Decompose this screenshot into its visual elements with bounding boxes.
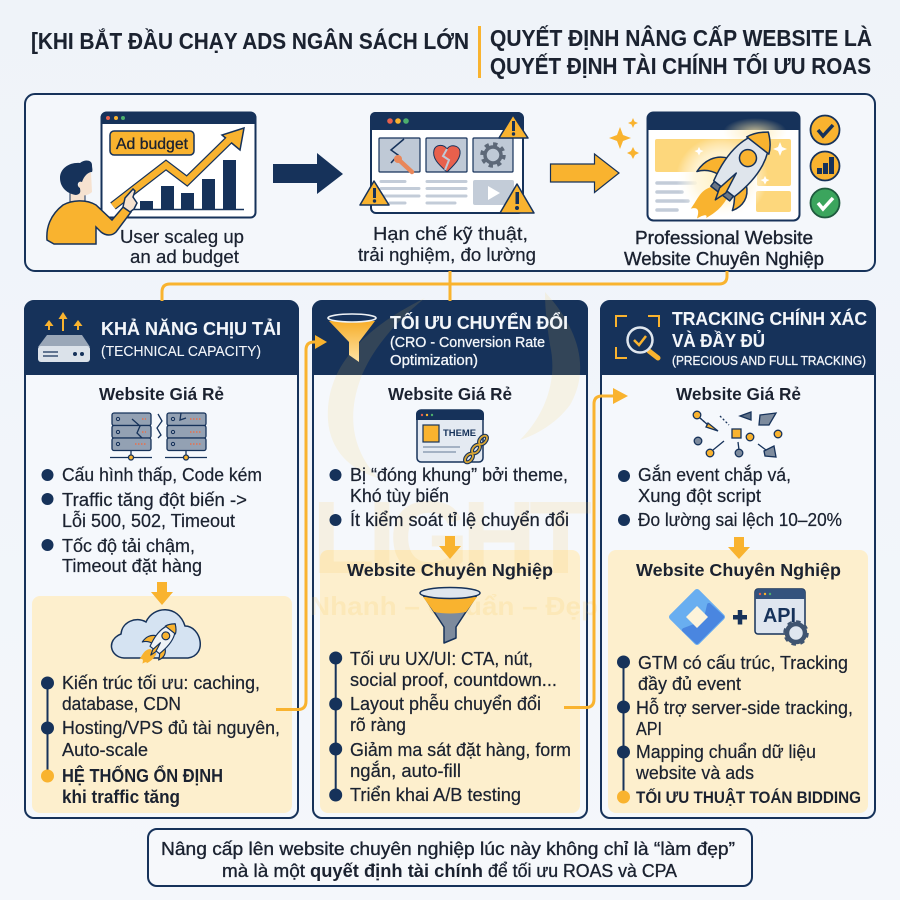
text: step two caption: Hạn chế kỹ thuật,	[373, 224, 528, 244]
connector: top panel to cards	[162, 271, 727, 301]
list: tracking solutions	[617, 653, 861, 807]
list: capacity problems: Traffic tăng đột biến ->	[62, 490, 247, 510]
icon: locked theme window	[416, 410, 489, 464]
arrow: navy flow arrow	[273, 153, 343, 194]
panel: tracking card frame	[600, 301, 876, 818]
heading: capacity card: (TECHNICAL CAPACITY)	[101, 344, 261, 360]
list: tracking solutions: TỐI ƯU THUẬT TOÁN BIDDING	[636, 787, 861, 807]
list: conversion solutions: social proof, countdown...	[350, 670, 557, 690]
list: conversion problems: Bị “đóng khung” bởi theme,	[350, 465, 568, 485]
title: left heading: [KHI BẮT ĐẦU CHẠY ADS NGÂN SÁCH LỚN	[31, 27, 469, 54]
heading: conversion card: TỐI ƯU CHUYỂN ĐỔI	[390, 312, 568, 333]
arrow: conversion down	[439, 536, 461, 559]
icon: person pointing	[47, 161, 137, 244]
list: capacity problems	[42, 465, 262, 576]
list: conversion solutions	[329, 649, 571, 805]
icon: API window with gear	[755, 589, 807, 644]
heading: professional website, card three: Website Chuyên Nghiệp	[636, 560, 841, 580]
text: step three caption	[624, 228, 824, 269]
list: capacity problems: Lỗi 500, 502, Timeout	[62, 510, 235, 531]
arrow: capacity down	[151, 582, 173, 605]
icon: browser with ad budget chart	[101, 112, 256, 218]
list: tracking solutions: Mapping chuẩn dữ liệu	[636, 742, 816, 762]
icon: API window with gear: API	[763, 605, 796, 627]
list: conversion solutions: Triển khai A/B testing	[350, 785, 521, 805]
list: conversion solutions: Giảm ma sát đặt hàng, form	[350, 740, 571, 760]
list: conversion solutions: Layout phễu chuyển đổi	[350, 693, 541, 714]
list: capacity solutions	[41, 673, 280, 807]
heading: conversion card	[390, 312, 568, 369]
icon: professional browser with rocket	[647, 112, 800, 235]
list: tracking problems	[618, 464, 842, 530]
callout: bottom conclusion: để tối ưu ROAS và CPA	[488, 861, 677, 881]
list: tracking solutions: đầy đủ event	[638, 674, 741, 694]
watermark: logo swirl and brand: LIGHT	[312, 480, 592, 595]
list: capacity solutions: khi traffic tăng	[62, 787, 180, 807]
list: conversion solutions: rõ ràng	[350, 715, 406, 735]
icon: sparkles	[609, 118, 639, 159]
connector: card one to card two	[276, 335, 327, 710]
arrow: tracking down	[728, 537, 750, 559]
title: right heading	[478, 24, 872, 79]
watermark: logo swirl and brand: Nhanh – Chuẩn – Đẹp	[310, 591, 598, 621]
text: step three caption: Website Chuyên Nghiệp	[624, 249, 824, 269]
heading: capacity card	[101, 318, 281, 360]
list: tracking solutions: website và ads	[635, 763, 754, 783]
icon: magnifier tracking	[616, 316, 659, 358]
heading: professional website, card two: Website Chuyên Nghiệp	[347, 560, 553, 580]
watermark: logo swirl and brand	[310, 292, 598, 621]
icon: scattered tracking events	[693, 411, 782, 457]
panel: capacity card frame	[24, 301, 299, 818]
icon: server with up arrows	[38, 312, 90, 362]
text: step two caption	[358, 224, 536, 265]
callout: bottom conclusion: mà là một	[222, 861, 305, 881]
list: capacity solutions: Kiến trúc tối ưu: caching,	[62, 673, 260, 693]
list: tracking solutions: GTM có cấu trúc, Tracking	[638, 653, 848, 673]
list: conversion problems: Ít kiểm soát tỉ lệ chuyển đổi	[350, 510, 569, 530]
callout: bottom conclusion	[148, 829, 752, 886]
text: step three caption: Professional Website	[635, 228, 813, 248]
panel: conversion card frame	[312, 301, 588, 818]
heading: cheap website, card three: Website Giá Rẻ	[676, 384, 801, 404]
list: conversion problems	[330, 465, 569, 530]
arrow: orange flow arrow	[550, 154, 619, 192]
list: tracking problems: Gắn event chắp vá,	[638, 464, 791, 485]
icon: plus	[733, 610, 747, 624]
list: tracking solutions: Hỗ trợ server-side tracking,	[636, 697, 853, 718]
heading: cheap website, card two: Website Giá Rẻ	[388, 384, 512, 404]
icon: browser with ad budget chart: Ad budget	[116, 136, 189, 153]
heading: capacity card: KHẢ NĂNG CHỊU TẢI	[101, 318, 281, 339]
list: tracking problems: Đo lường sai lệch 10–20%	[638, 510, 842, 530]
heading: conversion card: Optimization)	[390, 353, 478, 369]
list: capacity solutions: HỆ THỐNG ỔN ĐỊNH	[62, 765, 223, 786]
list: capacity solutions: Hosting/VPS đủ tài nguyên,	[62, 718, 280, 738]
heading: tracking card: (PRECIOUS AND FULL TRACKING)	[672, 353, 866, 368]
callout: bottom conclusion: Nâng cấp lên website chuyên nghiệp lúc này không chỉ là “làm đẹp”	[161, 839, 735, 859]
text: step one caption: User scaleg up	[120, 227, 244, 247]
icon: tag manager diamond	[672, 592, 722, 642]
list: conversion solutions: Tối ưu UX/UI: CTA, nút,	[350, 649, 533, 669]
list: capacity solutions: Auto-scale	[62, 740, 148, 760]
list: capacity problems: Cấu hình thấp, Code kém	[62, 465, 262, 485]
icon: professional funnel	[420, 588, 480, 643]
panel: top flow	[25, 94, 875, 271]
list: capacity problems: Tốc độ tải chậm,	[62, 536, 195, 556]
heading: tracking card	[672, 308, 867, 368]
icon: limited browser with warnings	[360, 112, 534, 213]
text: step two caption: trải nghiệm, đo lường	[358, 245, 536, 265]
icon: funnel header	[328, 314, 376, 362]
text: step one caption	[120, 227, 244, 267]
heading: tracking card: VÀ ĐẦY ĐỦ	[672, 330, 765, 351]
list: tracking solutions: API	[636, 719, 662, 739]
icon: broken servers	[110, 413, 207, 460]
list: conversion problems: Khó tùy biến	[350, 486, 449, 506]
connector: card two to card three	[564, 388, 628, 708]
list: capacity problems: Timeout đặt hàng	[62, 556, 202, 576]
heading: tracking card: TRACKING CHÍNH XÁC	[672, 308, 867, 329]
list: capacity solutions: database, CDN	[62, 694, 181, 714]
text: step one caption: an ad budget	[130, 247, 239, 267]
callout: bottom conclusion: quyết định tài chính	[310, 861, 483, 881]
heading: conversion card: (CRO - Conversion Rate	[390, 335, 545, 351]
heading: cheap website, card one: Website Giá Rẻ	[99, 384, 224, 404]
icon: locked theme window: THEME	[443, 428, 476, 439]
icon: status badges	[810, 116, 840, 218]
list: tracking problems: Xung đột script	[638, 486, 761, 506]
icon: cloud with rocket	[111, 610, 200, 671]
list: conversion solutions: ngắn, auto-fill	[350, 760, 461, 781]
